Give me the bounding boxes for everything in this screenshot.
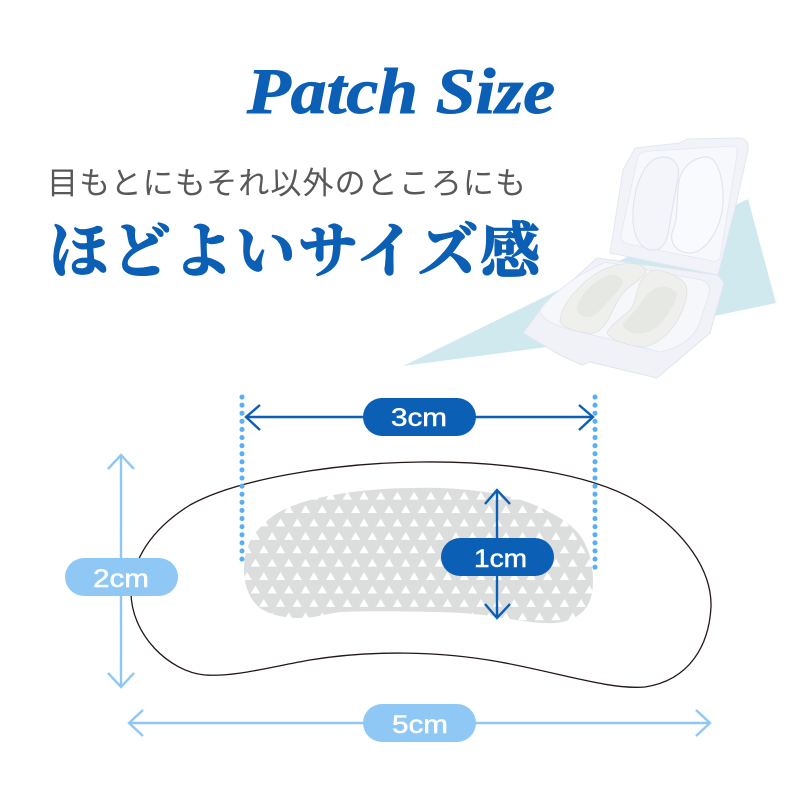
dimension: 2cm [65,455,178,687]
dimension: 5cm [129,704,710,742]
small patch: 3cm x 1cm, triangle pattern [244,488,593,623]
dotted guide: right [592,397,598,568]
large patch outline: 5cm x 2cm [131,462,711,687]
dotted guide: left [240,397,244,560]
background wedge [403,199,776,366]
dimension: 1cm [441,490,554,618]
dimension: 3cm: 3cm [391,404,447,432]
dimension: 5cm: 5cm [392,711,448,739]
tray lid [610,138,748,275]
dimension: 2cm: 2cm [93,565,149,593]
tray base [523,258,724,378]
title: Patch Size [246,56,555,128]
main heading: ほどよいサイズ感 [49,219,544,285]
product photo: patch tray [403,138,776,378]
packaged patches [560,264,687,347]
subtitle: 目もとにもそれ以外のところにも [47,166,526,201]
dimension: 1cm: 1cm [474,545,527,573]
dimension: 3cm [246,398,593,436]
